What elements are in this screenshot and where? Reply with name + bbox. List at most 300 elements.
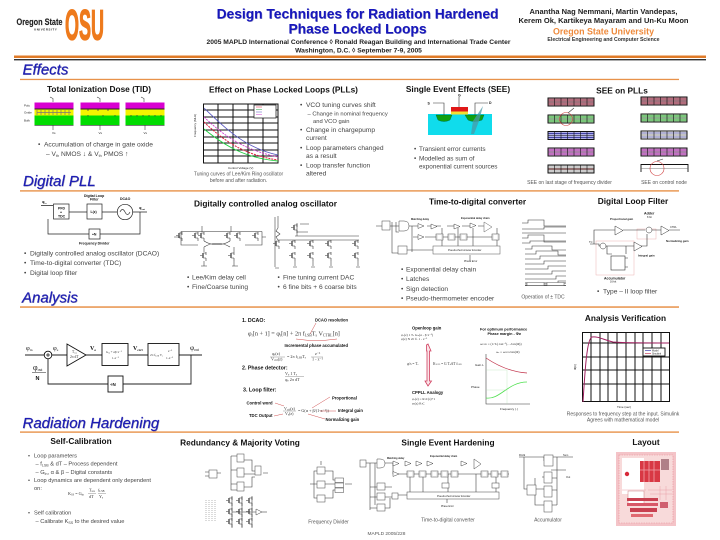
panel: optimum phase margin: ω UGB = (1/T s) tan⁻¹(…/tan(Φ))	[480, 342, 522, 346]
panel: openloop gain	[401, 326, 462, 406]
caption: Agrees with mathematical model	[587, 418, 659, 424]
bullets: Sign detection	[406, 286, 448, 293]
panel: equations: r	[280, 334, 282, 338]
panel: linear PLL model: 2π f	[150, 353, 155, 357]
bullets: •	[187, 274, 190, 282]
panel: equations: [n]	[333, 330, 340, 338]
bullets: digital PLL	[24, 250, 159, 277]
bullets: Fine/Coarse tuning	[192, 284, 248, 291]
bode plot: Frequency (·)	[500, 407, 518, 411]
panel: SEE on PLLs: SEE on PLLs	[596, 86, 648, 96]
panel: digital loop filter: Digital Loop Filter	[598, 196, 669, 206]
title: Design Techniques for Radiation Hardened	[217, 7, 499, 22]
bullets: digital PLL: •	[24, 250, 27, 258]
chart: tuning curves	[193, 104, 278, 170]
transistor stacks	[24, 97, 164, 135]
panel: self-calibration: on:	[34, 486, 42, 492]
panel: self-calibration: to the desired value	[73, 519, 124, 525]
panel: equations: s	[296, 374, 297, 377]
loop filter schematic	[589, 212, 689, 284]
panel: self-calibration: & dT – Process dependent	[49, 462, 118, 468]
panel: linear PLL model: φ	[33, 363, 38, 372]
logo: Oregon State University OSU: Oregon State	[16, 17, 62, 28]
loop filter schematic: Adder	[644, 212, 655, 216]
panel: equations: DCAO resolution	[315, 318, 348, 322]
panel: analysis verification	[567, 313, 680, 424]
panel: linear PLL model	[25, 344, 202, 392]
panel: equations	[242, 318, 363, 422]
bullets: exponential current sources	[419, 164, 498, 170]
authors: Anantha Nag Nemmani, Martin Vandepas,	[530, 7, 677, 16]
panel: linear PLL model: 1-z⁻¹	[166, 356, 173, 360]
bullets: Pseudo-thermometer encoder	[406, 296, 495, 302]
captions: SEE on control node	[641, 180, 687, 186]
panel: self-calibration: – G	[36, 470, 45, 476]
panel: openloop gain: Openloop gain	[412, 326, 442, 330]
TDC schematic: Matching delay	[411, 218, 430, 221]
bullets	[401, 266, 495, 302]
bullets: •	[401, 266, 404, 274]
caption: Time-to-digital converter	[421, 518, 475, 524]
transistor cross-section: D	[489, 101, 492, 105]
panel: equations: CTRL	[323, 334, 333, 338]
title: Design Techniques for Radiation Hardened	[217, 6, 498, 22]
panel: equations: V	[317, 330, 323, 338]
chip layout	[616, 452, 676, 526]
formula: LSB	[99, 490, 105, 493]
panel: linear PLL model: out	[38, 368, 43, 372]
majority voter transistors	[206, 496, 267, 528]
panel: equations: [n + 1] = φ	[253, 330, 280, 338]
formula: T	[89, 488, 92, 492]
chart: tuning curves: Frequency (MHz)	[193, 114, 197, 137]
panel: equations: r	[274, 354, 275, 357]
chart caption	[194, 172, 283, 184]
panel: equations: TDC Output	[249, 413, 273, 418]
panel: linear PLL model: e	[57, 348, 59, 352]
panel: digital PLL block diagram: PFD	[58, 206, 65, 210]
chart caption: Tuning curves of Lee/Kim Ring oscillator	[194, 172, 283, 178]
TDC schematic: Exponential delay chain	[461, 217, 490, 220]
loop filter schematic: Normalizing gain	[666, 239, 689, 243]
delay cell schematic	[174, 226, 266, 266]
panel: equations: V	[284, 406, 287, 411]
bode plot	[471, 354, 530, 411]
panel: equations: (z)	[290, 406, 295, 411]
panel: equations: Control word	[246, 400, 273, 406]
bullets: •	[38, 142, 41, 148]
hardened TDC schematic: Pseudo-thermometer Encoder	[437, 495, 471, 498]
panel: digital PLL block diagram: L(z)	[90, 210, 97, 214]
bullets: digital PLL: Time-to-digital converter (TDC)	[30, 260, 121, 267]
formula: = G	[74, 491, 82, 496]
bullets: as a result	[306, 153, 337, 160]
panel: linear PLL model: N	[36, 376, 40, 382]
loop filter schematic: TC	[589, 240, 593, 244]
panel: layout: Layout	[632, 437, 660, 447]
bullets: Accumulation of charge in gate oxide	[44, 142, 153, 148]
captions: SEE on last stage of frequency divider	[527, 180, 612, 186]
panel: equations: V	[271, 356, 274, 362]
bullets: •	[300, 102, 303, 109]
authors: Oregon State University	[553, 26, 654, 36]
transistor cross-section: S	[428, 102, 430, 106]
panel: equations: (z)	[289, 411, 294, 416]
bullets: NMOS ↓ & V	[59, 151, 99, 158]
bullets: digital PLL: Digitally controlled analog oscillator (DCAO)	[30, 250, 159, 258]
heading: Radiation Hardening: Radiation Hardening	[22, 415, 160, 432]
hardened TDC schematic	[360, 455, 509, 511]
panel: equations: s	[316, 334, 318, 338]
panel: equations: T	[302, 354, 305, 359]
bullets: •	[278, 274, 280, 282]
panel: effect on PLLs	[193, 84, 388, 184]
bullets: •	[300, 127, 303, 134]
panel: self-calibration: , α & β – Digital constants	[47, 470, 112, 476]
transistor stacks: Poly	[24, 104, 30, 108]
panel: self-calibration: Self calibration	[34, 510, 71, 516]
panel: equations: V	[285, 371, 288, 376]
bullets: •	[401, 286, 404, 293]
panel: linear PLL model: V	[90, 346, 94, 352]
bullets: – V	[46, 151, 56, 158]
panel: equations: LSB	[305, 334, 312, 338]
panel: equations: 2. Phase detector:	[242, 366, 288, 372]
panel: equations: T	[312, 330, 316, 338]
bullets	[414, 146, 498, 170]
bullets: Transient error currents	[419, 146, 486, 153]
chart: tuning curves: Control Voltage (V)	[228, 166, 253, 170]
panel: linear PLL model: φ	[190, 344, 194, 352]
panel: linear PLL model: out	[194, 348, 200, 352]
panel: self-calibration: •	[28, 478, 30, 484]
loop filter schematic: CTRL	[670, 225, 677, 229]
panel: equations: Proportional	[332, 396, 357, 400]
header rule	[14, 56, 706, 60]
current DAC schematic	[273, 216, 360, 268]
panel: equations: 1. DCAO:	[242, 318, 265, 324]
panel: optimum phase margin	[471, 328, 530, 411]
panel: equations: (z)	[278, 356, 283, 362]
chart: step response: Time (sec)	[617, 405, 631, 409]
panel: digital PLL block diagram: out	[142, 208, 145, 211]
panel: redundancy and majority voting	[180, 438, 352, 528]
transistor cross-section	[428, 94, 492, 135]
bullets: •	[401, 296, 404, 302]
heading: Effects: Effects	[22, 62, 69, 78]
transistor stacks: Vs	[144, 131, 148, 135]
bullets: Fine tuning current DAC	[283, 274, 354, 282]
title: Phase Locked Loops	[289, 22, 427, 37]
panel: single event effects	[406, 84, 510, 170]
panel: optimum phase margin: Phase margin - ΦM	[488, 332, 521, 336]
panel: digitally controlled analog oscillator	[174, 198, 360, 291]
panel: SEE on PLLs	[527, 86, 688, 186]
bullets: altered	[306, 170, 327, 178]
panel: equations: 3. Loop filter:	[243, 388, 277, 394]
transistor stacks: Oxide	[24, 110, 32, 114]
heading: Radiation Hardening: Radiation Hardening	[23, 416, 160, 432]
bullets: •	[187, 284, 190, 291]
accumulator schematic: Out	[566, 475, 570, 479]
panel: total ionization dose: Total Ionization Dose (TID)	[47, 84, 151, 94]
bullets: current	[306, 135, 327, 142]
panel: analysis verification: Analysis Verification	[585, 313, 666, 323]
panel: linear PLL model: LSB	[155, 356, 160, 358]
captions	[527, 180, 687, 186]
panel: equations: r	[252, 334, 254, 338]
bullets	[300, 102, 388, 178]
bullets: •	[414, 156, 416, 162]
formula: dT	[89, 494, 94, 499]
panel: redundancy and majority voting: Redundancy & Majority Voting	[180, 438, 300, 448]
formula	[68, 488, 106, 500]
panel: layout	[616, 437, 676, 526]
panel: equations: s	[305, 357, 306, 360]
panel: equations: = G(α + β/(1-z⁻¹))	[298, 408, 329, 413]
caption	[567, 412, 680, 424]
panel: openloop gain: K VCO = G T s/dT f LSB	[433, 362, 462, 366]
panel: linear PLL model: φ	[53, 345, 57, 352]
hardened TDC schematic: Exponential delay chain	[430, 455, 458, 458]
transistor stacks: Vs	[52, 131, 56, 135]
conference subtitle: Washington, D.C. ◊ September 7-9, 2005	[295, 48, 422, 54]
panel: digital PLL block diagram	[41, 194, 147, 246]
panel: equations: φ	[272, 351, 274, 356]
panel: digitally controlled analog oscillator: Digitally controlled analog oscillator	[194, 198, 338, 208]
transistor stacks: Vs	[98, 131, 103, 135]
formula: K	[68, 491, 71, 496]
caption: Responses to frequency step at the input. Simulink	[567, 412, 680, 418]
panel: total ionization dose	[24, 84, 164, 158]
panel: single event effects: Single Event Effects (SEE)	[406, 84, 510, 94]
panel: digital PLL block diagram: TDC	[58, 214, 66, 218]
bullets: Loop transfer function	[306, 162, 371, 170]
panel: openloop gain: φ e(z) = R 1C(s)+1	[412, 397, 435, 401]
panel: digital PLL block diagram: DCAO	[120, 197, 131, 201]
panel: openloop gain: φ(z) N 2π f L 1 - z⁻¹	[401, 337, 427, 341]
bullets: VCO tuning curves shift	[306, 102, 376, 109]
panel: self-calibration: LSB	[42, 463, 49, 467]
panel: linear PLL model: 2π dT	[70, 355, 79, 359]
panel: optimum phase margin: ω z = ω UGB/tan(Φ)	[496, 350, 520, 354]
loop filter schematic: Proportional gain	[610, 217, 633, 221]
panel: equations: = 2π f	[287, 354, 297, 359]
triplicated divider schematic	[310, 461, 352, 502]
panel: time-to-digital converter: Time-to-digital converter	[429, 196, 527, 206]
panel: equations: 2π dT	[289, 377, 300, 382]
panel: equations: Integral gain	[338, 408, 363, 413]
panel: equations: Normalizing gain	[326, 417, 360, 422]
TDC schematic: Pseudo-thermometer Encoder	[448, 249, 482, 252]
panel: digital loop filter	[589, 196, 689, 296]
panel: digital PLL block diagram: Frequency Divider	[79, 242, 110, 246]
panel: linear PLL model: res	[74, 352, 77, 355]
loop filter schematic: Accumulator	[604, 276, 626, 280]
panel: linear PLL model: 1-z⁻¹	[112, 356, 119, 360]
bullets	[187, 274, 357, 291]
conference subtitle: 2005 MAPLD International Conference ◊ Ronald Reagan Building and International Trade Center	[207, 39, 511, 46]
panel: openloop gain: φ e(z) 1 T s G in(α - β·z⁻¹)	[401, 333, 433, 337]
waveforms: frequency divider	[548, 98, 594, 173]
bode plot: Phase	[471, 385, 480, 389]
flip-flop voting schematic	[205, 454, 268, 491]
bullets: Change in chargepump	[306, 127, 375, 134]
bullets: th	[56, 154, 59, 158]
panel: digital PLL block diagram: +	[60, 210, 62, 214]
conference subtitle	[207, 39, 511, 54]
heading: Analysis: Analysis	[21, 290, 78, 306]
panel: equations: e	[287, 380, 289, 383]
bullets: •	[278, 284, 280, 291]
panel: equations: φ	[285, 377, 288, 382]
panel: optimum phase margin: For optimum performance	[480, 328, 527, 332]
panel: equations: [n] + 2π f	[281, 330, 306, 338]
title: Phase Locked Loops	[288, 22, 427, 36]
footer: poster id: MAPLD 2005/228	[368, 531, 406, 537]
panel: self-calibration: •	[28, 454, 30, 460]
panel: linear PLL model: ÷N	[110, 382, 116, 387]
panel: equations: V	[285, 411, 288, 416]
heading: Digital PLL: Digital PLL	[23, 173, 96, 190]
panel: self-calibration: Loop parameters	[34, 454, 77, 460]
waveform	[522, 220, 566, 286]
bullets: digital PLL: Digital loop filter	[30, 270, 78, 277]
waveforms: control node	[641, 97, 688, 176]
panel: self-calibration: in	[45, 472, 47, 476]
panel: linear PLL model: T	[72, 350, 74, 354]
panel: equations: ctrl	[274, 359, 278, 362]
panel: linear PLL model: T	[159, 353, 163, 357]
hardened TDC schematic: Phase Error	[441, 505, 454, 508]
caption: Operation of ± TDC	[521, 294, 565, 300]
bullet: Type – II loop filter	[603, 288, 658, 296]
formula: s	[102, 497, 103, 500]
panel: self-calibration: – f	[36, 462, 42, 468]
formula: SS	[71, 494, 75, 497]
panel: linear PLL model: φ	[26, 345, 30, 352]
panel: linear PLL model: + αβ·z⁻¹	[110, 350, 122, 354]
bullets: Latches	[406, 276, 430, 283]
bullets: •	[300, 145, 303, 152]
panel: linear PLL model: V	[133, 346, 137, 352]
formula: Y	[99, 494, 102, 499]
bullets: Exponential delay chain	[406, 266, 476, 274]
panel: linear PLL model: s	[162, 356, 163, 358]
bullets: digital PLL: •	[24, 270, 27, 277]
panel: equations: LSB	[297, 357, 302, 360]
panel: digital PLL block diagram: in	[45, 203, 47, 205]
bullets: •	[414, 146, 416, 153]
panel: self-calibration: •	[28, 510, 30, 516]
accumulator schematic: Fbclk	[519, 453, 526, 457]
loop filter schematic: 16-bit	[610, 280, 617, 284]
panel: self-calibration: Loop dynamics are dependent only dependent	[34, 478, 151, 484]
heading: Analysis: Analysis	[22, 290, 79, 307]
panel: digital PLL block diagram: Digital Loop	[84, 194, 104, 198]
caption: Frequency Divider	[308, 520, 349, 526]
logo: Oregon State University OSU: UNIVERSITY	[34, 28, 57, 32]
panel: linear PLL model: e	[94, 348, 96, 352]
bullets: •	[401, 276, 404, 283]
transistor cross-section: G	[458, 94, 461, 98]
TDC schematic: Phase Error	[464, 260, 478, 263]
panel: digital PLL block diagram: φ	[139, 206, 142, 210]
panel: self-calibration: – Calibrate K	[36, 519, 68, 525]
accumulator schematic: Sum	[563, 453, 568, 457]
bullets: – Change in nominal frequency	[308, 112, 388, 118]
panel: digital PLL block diagram: ÷N	[92, 232, 97, 236]
panel: time-to-digital converter	[376, 196, 566, 302]
chart caption: before and after radiation.	[210, 178, 267, 184]
panel: equations: 1 - z⁻¹	[312, 356, 324, 362]
formula: res	[92, 490, 95, 493]
panel: openloop gain: φ/s = T s	[407, 362, 418, 366]
chart: step response	[573, 332, 670, 409]
authors: Kerem Ok, Kartikeya Mayaram and Un-Ku Moon	[518, 16, 689, 25]
bullets: Loop parameters changed	[306, 145, 384, 152]
panel: self-calibration	[28, 436, 151, 525]
panel: equations: e	[288, 374, 290, 377]
formula: in	[82, 494, 84, 497]
panel: linear PLL model: in	[108, 352, 110, 354]
logo: Oregon State University OSU	[16, 2, 104, 50]
chart: step response: Φ[k]	[573, 364, 577, 370]
panel: equations: (z)	[275, 351, 281, 356]
panel: single event hardening: Single Event Hardening	[401, 438, 495, 448]
panel: digital PLL block diagram: Filter	[90, 198, 99, 202]
bullets: Modelled as sum of	[419, 156, 475, 162]
panel: single event hardening	[360, 438, 573, 524]
arrow	[425, 344, 432, 386]
formula: f	[98, 488, 99, 492]
panel: openloop gain: CPPLL Analogy	[412, 390, 444, 395]
bullets: Lee/Kim delay cell	[192, 274, 246, 282]
panel: linear PLL model: G	[106, 350, 108, 354]
chart: step response: Model	[652, 350, 659, 352]
bullets: •	[300, 162, 303, 170]
panel: linear PLL model: in	[30, 348, 33, 352]
authors: Electrical Engineering and Computer Science	[547, 37, 660, 43]
loop filter schematic: 8 bit	[647, 216, 652, 219]
transistor stacks: Bulk	[24, 118, 30, 122]
heading: Digital PLL: Digital PLL	[24, 174, 96, 190]
bode plot: Gain L	[475, 363, 484, 367]
panel: self-calibration: Self-Calibration	[50, 436, 112, 446]
bullets: th	[99, 154, 102, 158]
heading: Effects: Effects	[23, 62, 69, 79]
TDC schematic	[376, 217, 500, 263]
panel: equations: e	[288, 414, 290, 417]
panel: digital PLL block diagram: φ	[42, 200, 45, 204]
panel: equations: z⁻¹	[315, 351, 320, 356]
caption: Accumulator	[534, 518, 562, 524]
panel: equations: 1 T	[289, 371, 296, 376]
panel: openloop gain: φ i(z) R 1C	[412, 402, 426, 406]
bullets	[38, 142, 153, 158]
panel: linear PLL model: z⁻¹	[168, 349, 172, 353]
authors	[518, 7, 689, 43]
panel: equations: ctrl	[287, 409, 291, 412]
text: OSU	[65, 2, 104, 50]
hardened TDC schematic: Matching delay	[387, 457, 405, 460]
panel: self-calibration: SS	[68, 521, 74, 525]
loop filter schematic: Integral gain	[638, 254, 655, 258]
bullets: 6 fine bits + 6 coarse bits	[283, 284, 357, 291]
bullets: PMOS ↑	[102, 151, 128, 158]
panel: equations: Incremental phase accumulated	[284, 343, 348, 348]
bullet: •	[597, 288, 600, 296]
